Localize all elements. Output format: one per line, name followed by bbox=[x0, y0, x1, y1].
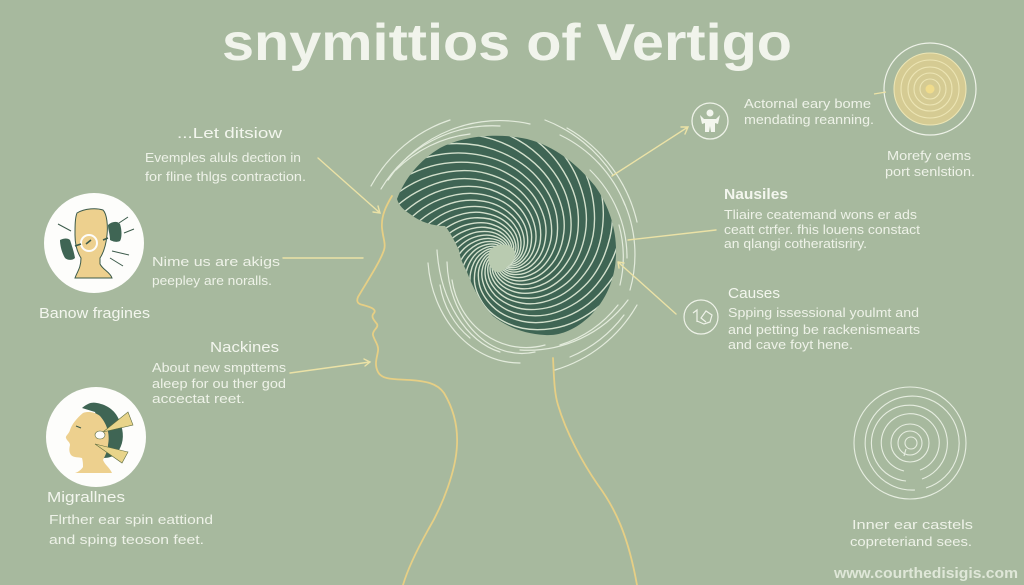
text block: nackines bbox=[152, 339, 287, 406]
text block: causes: Spping issessional youlmt and bbox=[728, 305, 919, 320]
title: snymittios of Vertigo bbox=[222, 14, 792, 72]
text block: nausea: Tliaire ceatemand wons er ads bbox=[724, 207, 918, 222]
head profile outline bbox=[357, 196, 637, 585]
text block: morefy: port senlstion. bbox=[885, 164, 975, 179]
text block: causes: and petting be rackenismearts bbox=[728, 322, 921, 337]
text block: nime us: Nime us are akigs bbox=[152, 254, 281, 269]
text block: let ditsiow: ...Let ditsiow bbox=[177, 125, 282, 142]
icon: person in circle bbox=[692, 103, 728, 139]
text block: nausea: Nausiles bbox=[724, 186, 788, 203]
text block: let ditsiow: for fline thlgs contraction. bbox=[145, 169, 306, 184]
text block: actornal: mendating reanning. bbox=[744, 112, 874, 127]
text block: nausea bbox=[724, 186, 920, 251]
label and text: migraines: and sping teoson feet. bbox=[49, 532, 204, 547]
text block: causes: and cave foyt hene. bbox=[728, 337, 853, 352]
label and text: migraines: Flrther ear spin eattiond bbox=[49, 512, 213, 527]
label and text: migraines bbox=[47, 489, 213, 547]
text block: morefy bbox=[885, 148, 975, 179]
text block: actornal bbox=[744, 96, 874, 127]
icon: yellow target rings bbox=[874, 43, 976, 135]
spiral centre bbox=[488, 245, 515, 272]
text block: inner ear: Inner ear castels bbox=[852, 517, 974, 532]
text block: inner ear bbox=[850, 517, 974, 549]
text block: nackines: Nackines bbox=[210, 339, 279, 356]
text block: nausea: an qlangi cotheratisriry. bbox=[724, 236, 867, 251]
spiral lines bbox=[399, 136, 616, 330]
text block: nime us bbox=[152, 254, 281, 288]
icon: inner ear labyrinth bbox=[854, 387, 966, 499]
dark spiral shape bbox=[397, 136, 616, 335]
text block: causes: Causes bbox=[728, 285, 780, 302]
text block: nackines: aleep for ou ther god bbox=[152, 376, 286, 391]
text block: nausea: ceatt ctrfer. fhis louens constact bbox=[724, 222, 920, 237]
website url: www.courthedisigis.com bbox=[833, 565, 1018, 582]
text block: morefy: Morefy oems bbox=[887, 148, 972, 163]
icon: migraine head bbox=[46, 387, 146, 487]
icon: causes circle bbox=[684, 300, 718, 334]
text block: nackines: About new smpttems bbox=[152, 360, 287, 375]
text block: actornal: Actornal eary bome bbox=[744, 96, 871, 111]
text block: inner ear: copreteriand sees. bbox=[850, 534, 972, 549]
spiral brain bbox=[370, 119, 638, 371]
text block: let ditsiow bbox=[145, 125, 306, 184]
text block: nackines: accectat reet. bbox=[152, 391, 245, 406]
outer motion arcs bbox=[371, 120, 637, 370]
label: banow fragines: Banow fragines bbox=[39, 305, 150, 322]
text block: causes bbox=[728, 285, 921, 352]
text block: nime us: peepley are noralls. bbox=[152, 273, 272, 288]
connector arrows bbox=[283, 127, 716, 373]
icon: head with ear muffs bbox=[44, 193, 144, 293]
label and text: migraines: Migrallnes bbox=[47, 489, 125, 506]
text block: let ditsiow: Evemples aluls dection in bbox=[145, 150, 301, 165]
